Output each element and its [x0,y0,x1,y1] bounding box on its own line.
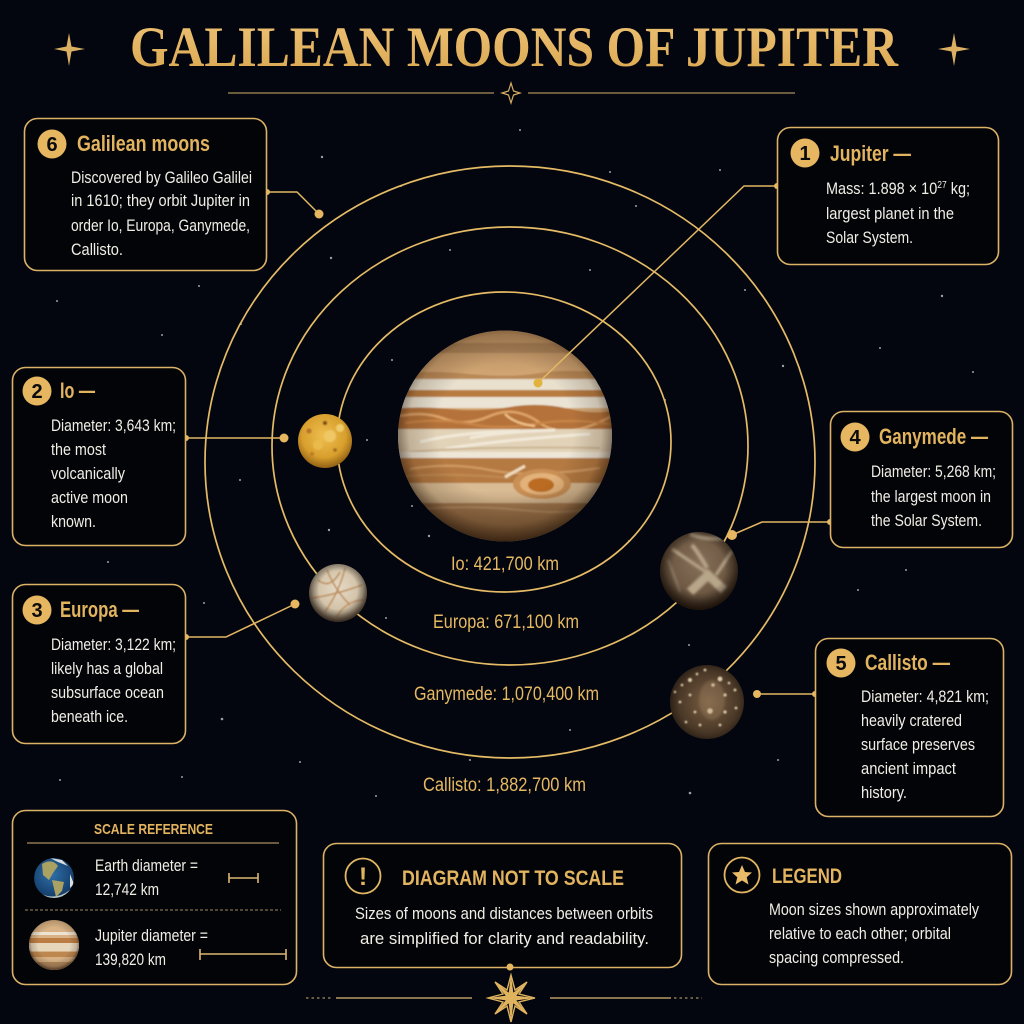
icon: left title star [54,33,85,66]
orbit: Callisto [205,166,815,758]
panel: Io: Diameter: 3,643 km; [51,416,176,435]
panel: scale reference [12,810,296,984]
icon: right title star [938,33,970,66]
panel: diagram not to scale: DIAGRAM NOT TO SCALE [402,867,624,890]
footer ornament [306,975,702,1022]
panel: Callisto: history. [861,783,907,802]
panel: Callisto: ancient impact [861,759,956,778]
icon: star [724,858,760,892]
panel: diagram not to scale [324,844,682,970]
panel: diagram not to scale: Sizes of moons and distances between orbits [355,904,653,923]
panel: legend: relative to each other; orbital [769,924,951,943]
panel: Ganymede [830,412,1012,548]
title divider [228,83,795,103]
panel: Europa: 3 [31,600,43,622]
panel: Jupiter: kg; [947,179,970,198]
panel: scale reference: SCALE REFERENCE [94,821,213,838]
panel: legend: Moon sizes shown approximately [769,900,979,919]
orbit: Europa and Io inner path [337,292,671,592]
panel: Europa: Diameter: 3,122 km; [51,635,176,654]
panel: Europa: Europa — [60,597,139,622]
panel: Europa: likely has a global [51,659,163,678]
panel: Callisto: heavily cratered [861,711,962,730]
icon: exclamation: ! [359,863,367,891]
connector: Io [183,434,288,442]
panel: Jupiter: Solar System. [826,228,913,247]
connector: Callisto [753,690,818,698]
panel: legend: LEGEND [772,865,842,888]
planet: Jupiter [398,330,612,542]
panel: Io: 2 [31,381,43,403]
icon: Earth [34,858,74,900]
panel: Galilean moons: order Io, Europa, Ganymede, [71,216,250,235]
panel: Io: active moon [51,488,128,507]
panel: Europa: beneath ice. [51,707,128,726]
connector: Jupiter [534,183,780,388]
panel: Jupiter: Jupiter — [830,141,911,166]
panel: Io: Io — [60,378,95,403]
moon: Ganymede [660,532,738,610]
star field [56,129,974,801]
panel: diagram not to scale: are simplified for clarity and readability. [360,929,649,948]
panel: Jupiter: 27 [937,180,947,191]
panel: scale reference: Earth diameter = [95,856,198,875]
panel: scale reference: 12,742 km [95,880,159,899]
panel: Galilean moons: 6 [46,134,58,156]
panel: Callisto [816,638,1004,816]
panel: legend [708,844,1012,984]
panel: Ganymede: the largest moon in [871,487,991,506]
scale bar: Jupiter [200,949,286,960]
panel: Jupiter [778,128,998,264]
panel: Io: known. [51,512,96,531]
connector: Galilean moons [264,189,324,218]
panel: Io: the most [51,440,106,459]
panel: Galilean moons: in 1610; they orbit Jupiter in [71,191,250,210]
panel: Jupiter: largest planet in the [826,204,954,223]
connector: Europa [183,600,300,640]
panel: Europa [12,584,186,744]
panel: scale reference: Jupiter diameter = [95,926,208,945]
panel: Callisto: 5 [835,653,847,675]
label: Europa orbit distance: Europa: 671,100 km [433,612,579,633]
label: Ganymede orbit distance: Ganymede: 1,070,400 km [414,684,599,705]
scale bar: Earth [229,873,258,883]
panel: Galilean moons: Galilean moons [77,131,210,156]
moon: Callisto [670,665,744,739]
label: Io orbit distance: Io: 421,700 km [451,554,559,575]
panel: Callisto: Callisto — [865,650,950,675]
label: Callisto orbit distance: Callisto: 1,882,700 km [423,775,586,796]
panel: Jupiter: 1 [799,143,811,165]
panel: Ganymede: Ganymede — [879,424,988,449]
panel: legend: spacing compressed. [769,948,904,967]
icon: Jupiter mini [29,920,79,970]
panel: Ganymede: the Solar System. [871,511,982,530]
orbit: Ganymede [272,227,748,665]
panel: Europa: subsurface ocean [51,683,164,702]
panel: Ganymede: Diameter: 5,268 km; [871,462,996,481]
connector: Ganymede [727,519,833,540]
panel: Io: volcanically [51,464,125,483]
panel: Jupiter: Mass: 1.898 × 10 [826,179,957,198]
moon: Io [298,414,352,468]
panel: Galilean moons: Discovered by Galileo Galilei [71,168,252,187]
panel: Callisto: Diameter: 4,821 km; [861,687,989,706]
panel: Ganymede: 4 [849,427,861,449]
panel: Galilean moons: Callisto. [71,240,123,259]
moon: Europa [309,564,367,622]
panel: scale reference: 139,820 km [95,950,166,969]
panel: Galilean moons [24,118,266,270]
title: GALILEAN MOONS OF JUPITER [130,16,899,79]
icon: exclamation [346,858,380,894]
panel: Callisto: surface preserves [861,735,975,754]
panel: Io [12,368,186,546]
